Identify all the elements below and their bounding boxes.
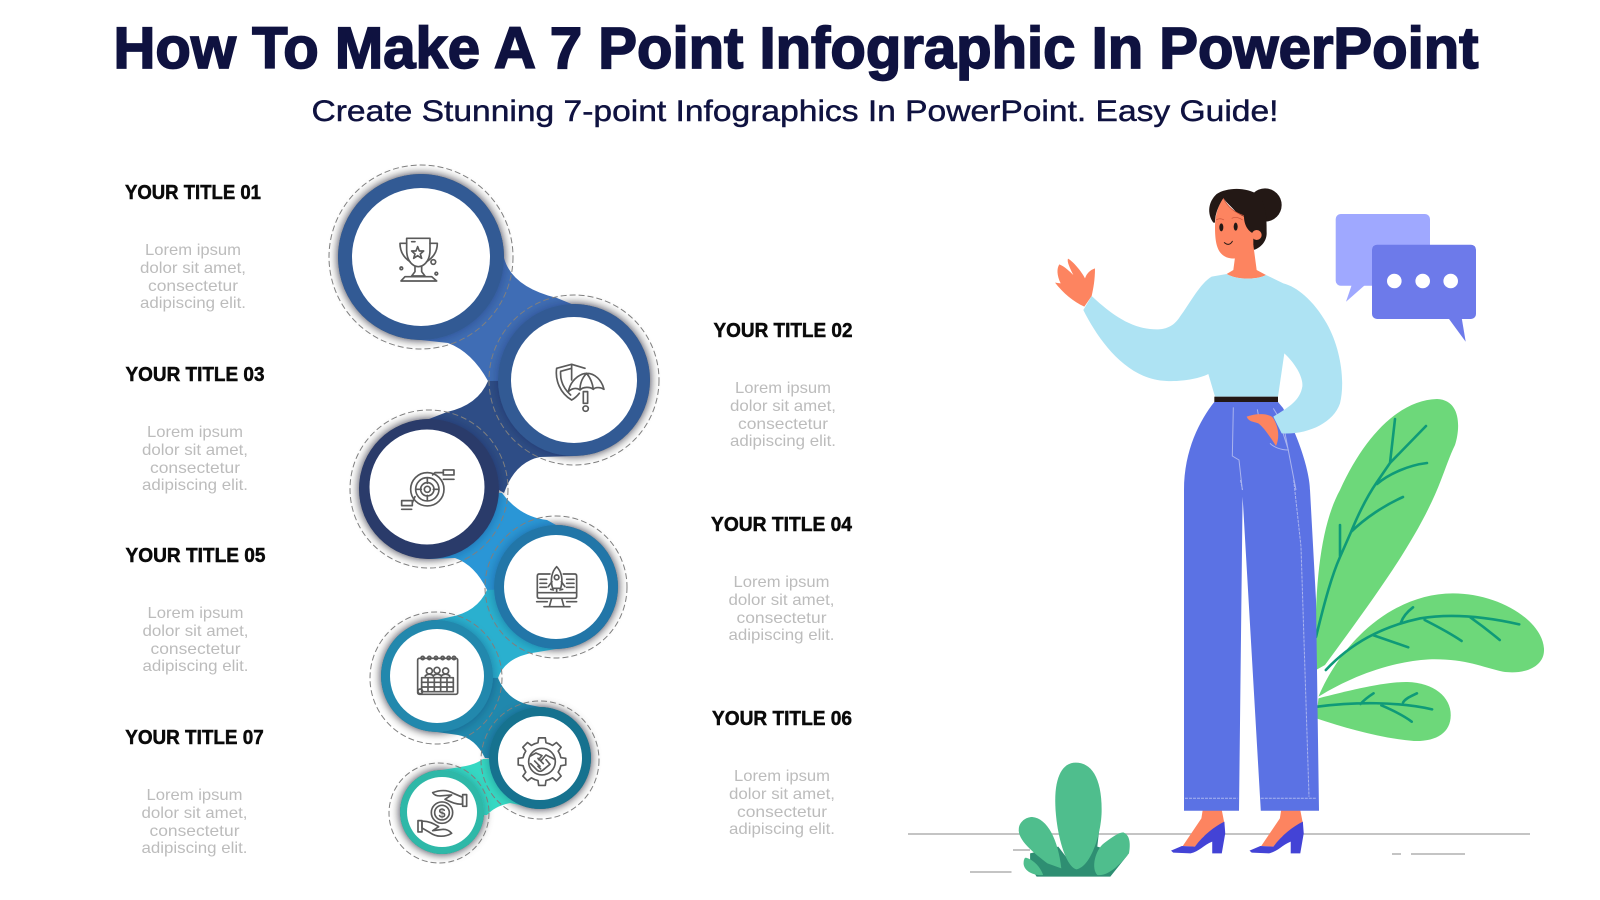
icon: shield and umbrella [556,364,604,411]
text block: title 02 [714,320,852,450]
text block: title 04: consectetur [736,610,827,627]
pants upper seams [1232,407,1296,490]
text block: title 06: consectetur [737,804,828,821]
text block: title 05: dolor sit amet, [142,623,248,640]
text block: title 07: adipiscing elit. [142,840,248,857]
text block: title 07 [125,727,264,857]
icon: trophy [400,238,438,281]
text block: title 01: dolor sit amet, [140,260,246,277]
bubble dots [1387,274,1458,288]
text block: title 07: dolor sit amet, [142,805,248,822]
text block: title 04: Lorem ipsum [734,574,830,591]
text block: title 02: Lorem ipsum [735,380,831,397]
circle 7 with money hands icon [389,763,489,863]
ground lines [908,834,1530,872]
circle 3 with target icon [350,410,508,568]
pants seams [1185,480,1316,798]
subtitle: Create Stunning 7-point Infographics In PowerPoint. Easy Guide! [312,95,1278,128]
text block: title 02: adipiscing elit. [730,433,836,450]
icon: target [402,470,454,509]
text block: title 06 [712,708,852,838]
text block: title 03: YOUR TITLE 03 [126,364,264,386]
plant: large leaves [1316,399,1544,741]
text block: title 06: adipiscing elit. [729,821,835,838]
icon: rocket monitor [537,567,577,607]
bubble: front [1372,245,1476,342]
text block: title 02: consectetur [738,416,829,433]
plant: small bush [1019,763,1130,877]
pants [1184,402,1319,811]
text block: title 06: YOUR TITLE 06 [712,708,852,730]
text block: title 03: adipiscing elit. [142,477,248,494]
text block: title 05 [126,545,266,675]
icon: gear handshake [518,738,566,785]
text block: title 01: consectetur [148,278,239,295]
outer ring shadows [338,174,650,854]
circle 1 with trophy icon [329,165,513,349]
text block: title 06: Lorem ipsum [734,768,830,785]
text block: title 01: YOUR TITLE 01 [125,182,261,204]
icon: hands with coin: $ [438,806,446,820]
text block: title 03 [126,364,264,494]
eyes and smile [1216,198,1244,244]
hair [1209,189,1267,250]
text block: title 01: Lorem ipsum [145,242,241,259]
hair bun [1248,188,1282,222]
title: How To Make A 7 Point Infographic In PowerPoint [114,16,1479,81]
text block: title 07: YOUR TITLE 07 [125,727,264,749]
circle 5 with calendar icon [370,612,502,744]
leaf: middle [1318,593,1544,697]
shoes and ankles [1171,810,1304,853]
leaf: bottom [1316,682,1451,741]
hand in pocket [1247,414,1278,446]
text block: title 01: adipiscing elit. [140,295,246,312]
upper body in zoom coordinates [1055,188,1342,490]
circle 2 with shield umbrella icon [489,295,659,465]
belt [1214,397,1278,402]
text block: title 02: YOUR TITLE 02 [714,320,852,342]
text block: title 04: adipiscing elit. [728,627,834,644]
connector 5-6 [437,676,540,758]
leaf: top [1316,399,1458,670]
text block: title 04: YOUR TITLE 04 [711,514,853,536]
text block: title 01 [125,182,261,312]
text block: title 06: dolor sit amet, [729,786,835,803]
connector 3-4 [429,489,556,590]
face [1215,198,1253,259]
text block: title 04 [711,514,853,644]
leaf veins: top [1316,419,1427,637]
text block: title 07: Lorem ipsum [146,787,242,804]
icon: calendar [418,656,458,694]
bubble: back [1336,214,1430,302]
circle 4 with rocket monitor icon [485,516,627,658]
waving hand [1055,259,1095,307]
text block: title 03: dolor sit amet, [142,442,248,459]
speech bubbles [1336,214,1476,342]
sweater [1083,274,1342,433]
connector 6-7 [442,758,540,815]
leaf veins: middle and bottom [1317,607,1519,722]
connector bands between circles [421,258,574,815]
connector 4-5 [437,587,556,678]
circle 6 with gear handshake icon [481,701,599,819]
connector 1-2 [421,258,574,381]
woman figure [1055,188,1342,853]
neck [1227,245,1266,279]
lower leaves in zoom coordinates [1316,593,1544,741]
text block: title 07: consectetur [150,823,240,840]
text block: title 03: consectetur [150,460,241,477]
text block: title 05: consectetur [150,641,241,658]
ear [1252,230,1262,240]
text block: title 03: Lorem ipsum [147,424,243,441]
text block: title 05: Lorem ipsum [148,605,244,622]
text block: title 04: dolor sit amet, [728,592,834,609]
text block: title 05: YOUR TITLE 05 [126,545,266,567]
text block: title 05: adipiscing elit. [142,658,248,675]
text block: title 02: dolor sit amet, [730,398,836,415]
connector 2-3 [429,380,574,493]
